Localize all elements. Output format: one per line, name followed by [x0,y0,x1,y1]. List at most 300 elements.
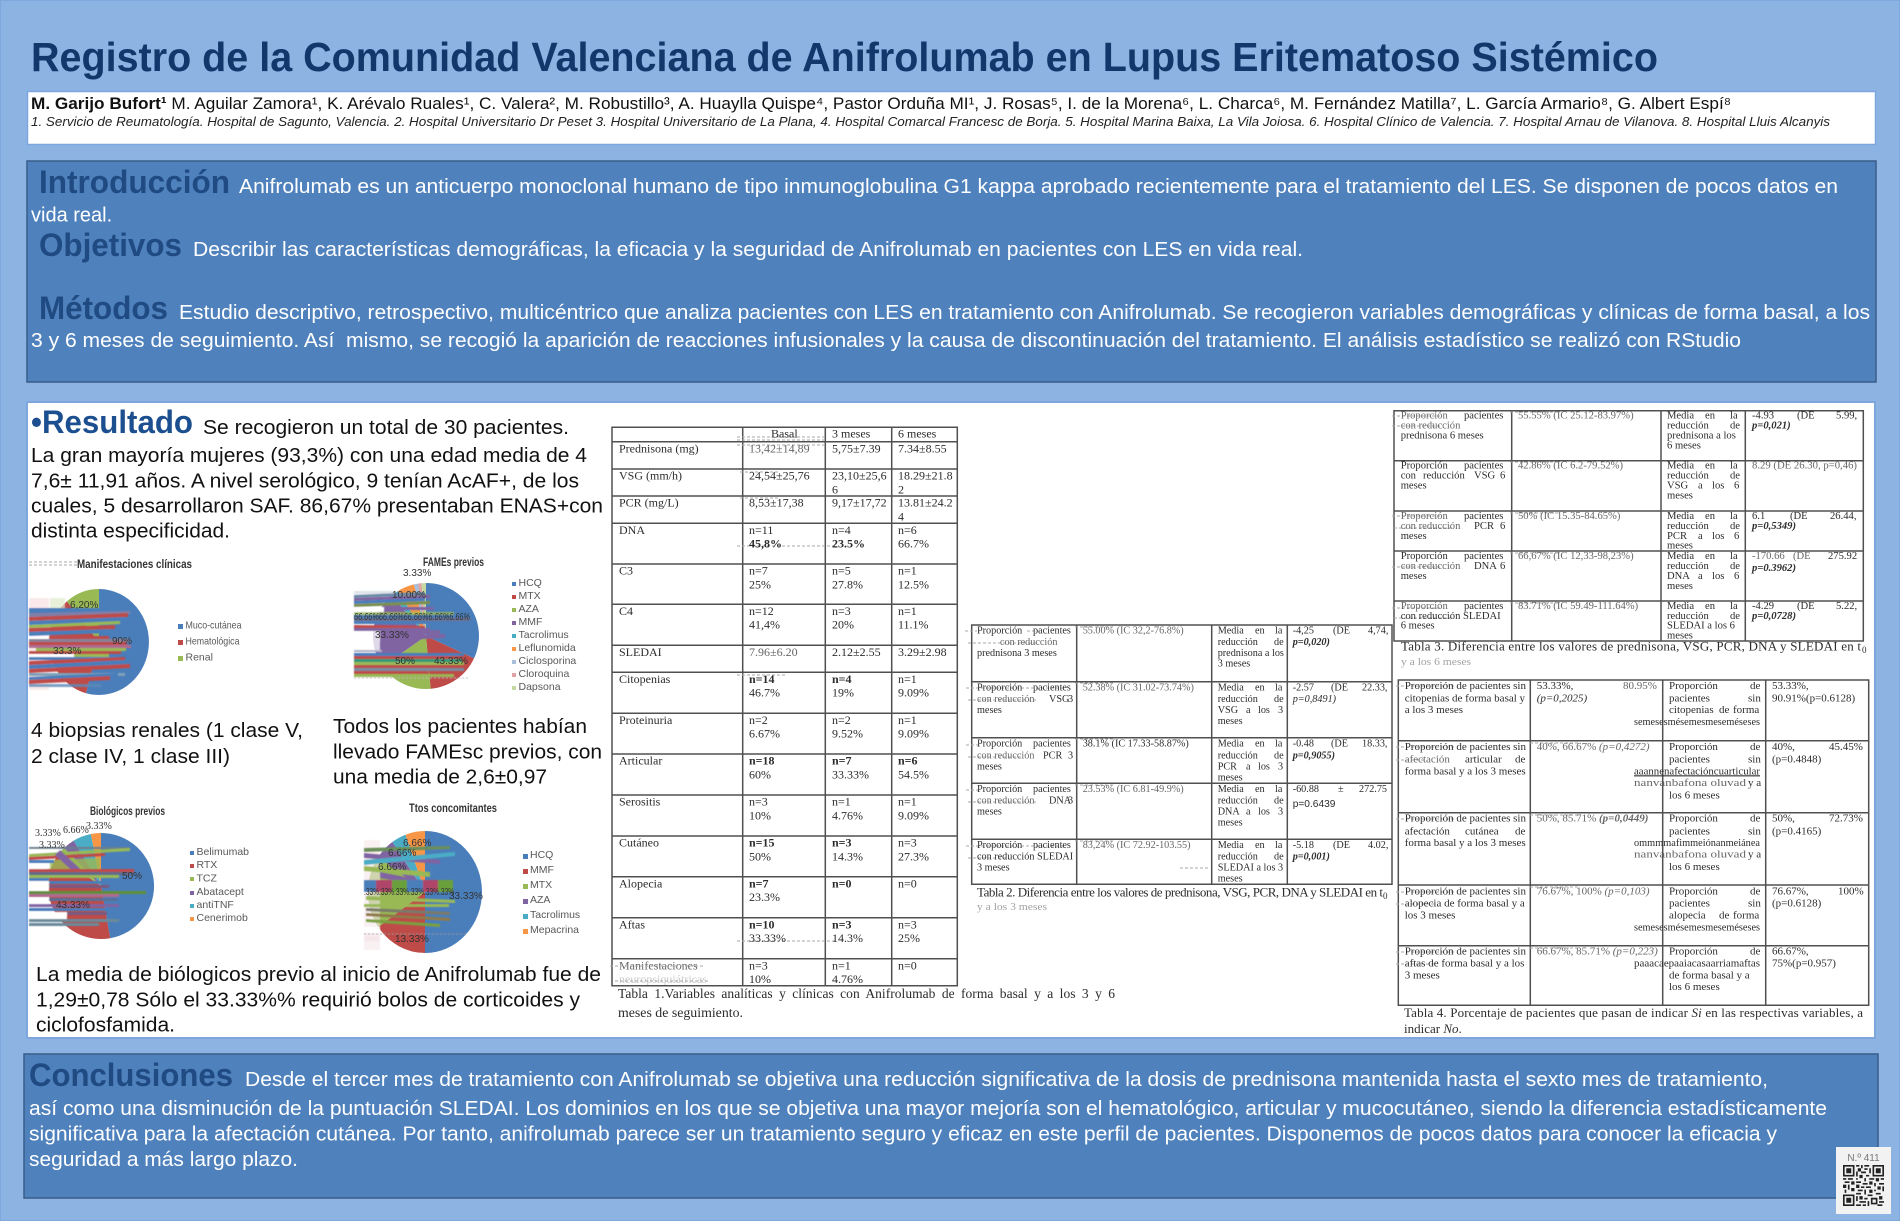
table 1: analytical and clinical variables: Proteinuria [619,713,673,727]
chart: FAMEs previos: 50% [395,656,415,667]
table 3: differences at 6 months: 42.86% (IC 6.2-79.52%) [1518,460,1624,471]
table 1: analytical and clinical variables: n=14 [749,672,775,686]
table 3: differences at 6 months: en [1705,511,1716,522]
table 2: differences at 3 months: pacientes [1033,784,1071,795]
table 3: differences at 6 months: meses [1667,540,1693,551]
table 2: differences at 3 months: 3 [1068,796,1073,807]
legend: TCZ [196,872,217,884]
table 1: analytical and clinical variables: n=0 [832,876,852,890]
table 3: differences at 6 months: 5.22, [1836,601,1857,612]
table 2: differences at 3 months: a [1246,705,1251,716]
table 1: analytical and clinical variables: 66.7% [898,537,929,551]
table 4: patients changing from yes to no: alopecia [1669,910,1706,922]
table 4: patients changing from yes to no: ommmmafimmeiónanmeiánea [1634,837,1760,849]
table 4: patients changing from yes to no: pacientes [1669,754,1710,766]
table 1: analytical and clinical variables: 7.96±6.20 [749,645,798,659]
table 2: differences at 3 months: 3 meses [1218,659,1250,670]
table 4: patients changing from yes to no: afectación [1405,754,1450,766]
table 2: differences at 3 months: meses [977,705,1002,716]
table 2: differences at 3 months: pacientes [1033,625,1071,636]
legend: Cloroquina [518,668,569,680]
table 1: analytical and clinical variables: Alopecia [619,876,663,890]
table 2: differences at 3 months: los [1258,761,1270,772]
table 4: patients changing from yes to no: Proporción [1669,885,1718,897]
table 1: analytical and clinical variables: n=18 [749,754,775,768]
legend [512,577,576,693]
table 4: patients changing from yes to no: (p=0,2025) [1537,693,1588,705]
table 3: differences at 6 months: pacientes [1464,601,1503,612]
table 3: differences at 6 months: 275.92 [1828,551,1857,562]
table 2: differences at 3 months: meses [1218,874,1243,885]
table 3: differences at 6 months: 83.71% (IC 59.49-111.64%) [1518,601,1639,612]
table 3: differences at 6 months: 6 [1500,521,1505,532]
table 1: analytical and clinical variables: n=12 [749,604,774,618]
table 4: patients changing from yes to no: de [1719,704,1730,716]
chart: Ttos concomitantes: 6.66% [378,862,406,873]
heading: Introducción: Introducción [39,164,230,200]
table 2: differences at 3 months: p=0,001) [1292,852,1330,863]
table 3: differences at 6 months: 6 [1734,480,1739,491]
table 4: patients changing from yes to no: y a [1748,777,1761,789]
table 1: analytical and clinical variables: 45,8% [749,537,782,551]
table 2: differences at 3 months: la [1275,739,1283,750]
table 4: patients changing from yes to no: 3 meses [1405,969,1440,981]
legend: MMF [530,864,554,876]
panel: introduction, objectives, methods [27,161,1876,382]
table 4: patients changing from yes to no: Proporción [1669,741,1718,753]
table 3: differences at 6 months: en [1705,551,1716,562]
table 4: patients changing from yes to no: Proporción de pacientes sin [1405,741,1526,753]
table 3: differences at 6 months: de [1730,561,1740,572]
table 1: analytical and clinical variables: 23.3% [749,890,780,904]
table 1: analytical and clinical variables: 6.67% [749,727,780,741]
chart: Ttos concomitantes: 13.33% [395,934,429,945]
table 2: differences at 3 months: 3 [1068,694,1073,705]
panel: authors [28,92,1876,144]
table 3: differences at 6 months: pacientes [1464,410,1503,421]
table 1: analytical and clinical variables: n=3 [749,958,768,972]
icon: QR code [1843,1165,1884,1206]
table 4: patients changing from yes to no: Proporción [1669,680,1718,692]
table 2: differences at 3 months: -60.88 [1293,784,1319,795]
table 3: differences at 6 months: SLEDAI a los 6 [1667,621,1735,632]
table 3: differences at 6 months: Media [1667,551,1694,562]
table 2: differences at 3 months: 23.53% (IC 6.81-49.9%) [1083,784,1184,795]
caption: table 2: y a los 3 meses [977,902,1047,913]
text: conclusions [29,1069,1827,1171]
chart: FAMEs previos: 3.33% [403,568,431,579]
table 3: differences at 6 months: meses [1401,480,1427,491]
table 3: differences at 6 months: de [1730,420,1740,431]
table 3: differences at 6 months: Proporción [1401,410,1448,421]
table 4: patients changing from yes to no: y a [1748,849,1761,861]
legend: Tacrolimus [518,629,569,641]
table 1: analytical and clinical variables: n=7 [749,876,769,890]
table 3: differences at 6 months: a [1698,531,1703,542]
table 2: differences at 3 months: 52.38% (IC 31.02-73.74%) [1083,682,1194,693]
text: previous biologics: 1,29±0,78 Sólo el 33.33%% requirió bolos de corticoides y [36,990,580,1012]
table 2: differences at 3 months: Media [1218,784,1244,795]
table 3: differences at 6 months: Media [1667,511,1694,522]
table 1: analytical and clinical variables: 7.34±8.55 [898,441,947,455]
table 3: differences at 6 months: DNA [1474,561,1497,572]
table 2: differences at 3 months: la [1275,682,1283,693]
table 4: patients changing from yes to no: forma [1733,704,1759,716]
table 1: analytical and clinical variables: 14.3% [832,849,863,863]
table 2: differences at 3 months: DNA [1218,807,1240,818]
table 4: patients changing from yes to no: citopenias [1669,704,1714,716]
table 4: patients changing from yes to no: citopenias de forma basal y [1405,693,1526,705]
table 1: analytical and clinical variables [610,426,957,986]
table 3: differences at 6 months: p=0.3962) [1751,563,1796,574]
chart: FAMEs previos [354,555,576,693]
table 4: patients changing from yes to no: forma [1733,910,1759,922]
legend: Renal [186,652,213,664]
table 4: patients changing from yes to no: 66.67%, 85.71% (p=0,223) [1537,945,1658,957]
caption: table 3 [1401,639,1867,668]
table 4: patients changing from yes to no: sin [1748,754,1761,766]
table 1: analytical and clinical variables: 2 [898,482,904,496]
table 2: differences at 3 months: SLEDAI a los 3 [1218,863,1283,874]
table 3: differences at 6 months: con [1401,470,1417,481]
table 2: differences at 3 months: meses [1218,818,1243,829]
table 3: differences at 6 months: 5.99, [1836,410,1857,421]
table 1: analytical and clinical variables: n=5 [832,564,851,578]
chart: Ttos concomitantes: Ttos concomitantes [409,801,497,815]
text: methods: Estudio descriptivo, retrospectivo, multicéntrico que analiza pacientes con LES en tratamiento con Anifrolumab. Se recogieron variables demográficas y clínicas de forma basal, a los [179,302,1870,324]
text: objectives: Describir las características demográficas, la eficacia y la seguridad de Anifrolumab en pacientes con LES en vida real. [193,239,1303,261]
table 4: patients changing from yes to no: semesesmésemesmeseméseses [1634,921,1760,933]
table 2: differences at 3 months: con reducción SLEDAI [977,852,1074,863]
table 3: differences at 6 months: 26.44, [1830,511,1856,522]
table 1: analytical and clinical variables: n=3 [832,604,851,618]
chart: FAMEs previos: 66.66%66.66%66.66%6.66%6.66% [354,612,470,623]
table 1: analytical and clinical variables: n=3 [898,917,917,931]
table 2: differences at 3 months: (DE [1331,682,1348,693]
table 2: differences at 3 months: Proporción [977,739,1022,750]
chart: Manifestaciones clínicas: Manifestaciones clínicas [77,557,192,571]
chart: Biológicos previos [29,804,249,939]
table 1: analytical and clinical variables: 10% [749,972,771,986]
table 2: differences at 3 months: reducción [1218,750,1258,761]
legend: Tacrolimus [530,909,580,921]
heading: Objetivos: Objetivos [39,227,182,263]
text: demographics: Se recogieron un total de 30 pacientes. [203,417,569,439]
table 3: differences at 6 months: en [1705,460,1716,471]
table 1: analytical and clinical variables: 23.5% [832,537,865,551]
table 4: patients changing from yes to no: paaacaepaaiacasaarriamaftas [1634,958,1760,970]
table 4: patients changing from yes to no: nanvanbafona oluvad [1634,849,1747,861]
table 2: differences at 3 months: a [1246,807,1251,818]
table 1: analytical and clinical variables: 9.09% [898,808,929,822]
legend: antiTNF [196,899,234,911]
table 4: patients changing from yes to no: 40%, 66.67% (p=0,4272) [1537,741,1650,753]
legend: RTX [196,859,217,871]
table 3: differences at 6 months: la [1730,551,1738,562]
table 3: differences at 6 months: la [1730,601,1738,612]
table 4: patients changing from yes to no: nanvanbafona oluvad [1634,777,1747,789]
table 3: differences at 6 months: la [1730,511,1738,522]
table 3: differences at 6 months: meses [1667,490,1693,501]
table 1: analytical and clinical variables: neuropsiquiátricas [619,972,707,986]
table 1: analytical and clinical variables: n=2 [749,713,768,727]
table 2: differences at 3 months: -5.18 [1293,840,1314,851]
legend [190,846,249,924]
table 3: differences at 6 months: Proporción [1401,601,1448,612]
table 2: differences at 3 months: de [1274,750,1284,761]
table 3: differences at 6 months: Proporción [1401,511,1448,522]
table 4: patients changing from yes to no: 53.33%, [1537,680,1574,692]
table 1: analytical and clinical variables: VSG (mm/h) [619,469,682,483]
table 2: differences at 3 months: -0.48 [1293,739,1314,750]
table 1: analytical and clinical variables: n=6 [898,754,918,768]
table 3: differences at 6 months: Proporción [1401,460,1448,471]
table 1: analytical and clinical variables: 4.76% [832,972,863,986]
table 2: differences at 3 months: Media [1218,739,1244,750]
chart: Manifestaciones clínicas: 6,20% [70,600,98,611]
table 1: analytical and clinical variables: 14.3% [832,931,863,945]
table 1: analytical and clinical variables: n=2 [832,713,851,727]
author list: M. Garijo Bufort¹ M. Aguilar Zamora¹, K. Arévalo Ruales¹, C. Valera², M. Robustillo³, A. Huaylla Quispe⁴, Pastor Orduña MI¹, J. Rosas⁵, I. de la Morena⁶, L. Charca⁶, M. Fernández Matilla⁷, L. García Armario⁸, G. Albert Espí⁸ [31,95,1731,113]
table 3: differences at 6 months: la [1730,410,1738,421]
text: previous biologics [36,964,601,1036]
table 3: differences at 6 months: la [1730,460,1738,471]
text: previous csDMARDs: Todos los pacientes habían [333,716,587,738]
table 4: patients changing from yes to no: 80.95% [1623,680,1657,692]
table 1: analytical and clinical variables: C4 [619,604,633,618]
table 2: differences at 3 months: p=0,9055) [1292,750,1335,761]
table 4: patients changing from yes to no: de forma basal y a [1669,969,1750,981]
table 2: differences at 3 months: 18.33, [1362,739,1387,750]
text: introduction: Anifrolumab es un anticuerpo monoclonal humano de tipo inmunoglobulina G1 kappa aprobado recientemente para el tratamiento del LES. Se disponen de pocos datos en [239,176,1838,198]
chart: Biológicos previos: 3.33% [35,828,61,839]
table 1: analytical and clinical variables: 24,54±25,76 [749,469,810,483]
text: demographics: distinta especificidad. [31,520,230,542]
table 2: differences at 3 months: de [1274,852,1284,863]
table 1: analytical and clinical variables: 54.5% [898,767,929,781]
table 3: differences at 6 months: reducción [1667,470,1709,481]
caption: table 1: meses de seguimiento. [618,1005,743,1020]
table 3: differences at 6 months: (DE [1793,551,1811,562]
table 4: patients changing from yes to no: 50%, [1772,813,1795,825]
table 4: patients changing from yes to no: Proporción de pacientes sin [1405,945,1526,957]
table 3: differences at 6 months: meses [1401,531,1427,542]
table 1: analytical and clinical variables: 3 meses [832,426,871,440]
table 2: differences at 3 months: en [1255,682,1265,693]
table 2: differences at 3 months: pacientes [1033,739,1071,750]
table 3: differences at 6 months: reducción [1667,521,1709,532]
legend: Leflunomida [518,642,576,654]
table 2: differences at 3 months: DNA [1049,796,1072,807]
table 3: differences at 6 months: (DE [1797,410,1815,421]
table 4: patients changing from yes to no: Proporción de pacientes sin [1405,885,1526,897]
table 2: differences at 3 months: reducción [1218,796,1258,807]
table 1: analytical and clinical variables: n=1 [898,713,917,727]
table 2: differences at 3 months: 38.1% (IC 17.33-58.87%) [1083,739,1189,750]
table 2: differences at 3 months: 4,74, [1368,625,1388,636]
table 1: analytical and clinical variables: n=0 [898,876,917,890]
table 1: analytical and clinical variables: 46.7% [749,686,780,700]
table 2: differences at 3 months: PCR [1043,750,1062,761]
table 4: patients changing from yes to no: 53.33%, [1772,680,1809,692]
table 1: analytical and clinical variables: 20% [832,618,854,632]
table 1: analytical and clinical variables: 27.3% [898,849,929,863]
table 2: differences at 3 months: 4.02, [1368,840,1388,851]
table 3: differences at 6 months: los [1712,531,1724,542]
legend [178,620,242,664]
table 3: differences at 6 months: 66,67% (IC 12,33-98,23%) [1518,551,1634,562]
chart: FAMEs previos: FAMEs previos [423,555,484,569]
caption: table 3: Tabla 3. Diferencia entre los valores de prednisona, VSG, PCR, DNA y SLEDAI en t [1401,639,1861,654]
table 1: analytical and clinical variables: 6 meses [898,426,937,440]
table 1: analytical and clinical variables: 18.29±21.8 [898,469,953,483]
table 2: differences at 3 months: meses [1218,716,1243,727]
table 3: differences at 6 months: p=0,021) [1751,420,1791,431]
table 4: patients changing from yes to no: forma basal y a los 3 meses [1405,837,1526,849]
table 3: differences at 6 months: meses [1401,571,1427,582]
chart: Biológicos previos: Biológicos previos [90,804,165,818]
table 2: differences at 3 months: p=0.6439 [1293,799,1336,810]
table 3: differences at 6 months: prednisona a los [1667,430,1736,441]
table 3: differences at 6 months: reducción [1667,420,1709,431]
table 4: patients changing from yes to no: sin [1748,693,1761,705]
table 3: differences at 6 months: (DE [1797,601,1815,612]
table 1: analytical and clinical variables: 4.76% [832,808,863,822]
table 2: differences at 3 months: VSG [1049,694,1070,705]
table 1: analytical and clinical variables: 60% [749,767,771,781]
table 4: patients changing from yes to no: los 3 meses [1405,910,1455,922]
table 4: patients changing from yes to no: de [1515,754,1526,766]
table 3: differences at 6 months: VSG [1474,470,1496,481]
table 1: analytical and clinical variables: n=15 [749,836,775,850]
table 1: analytical and clinical variables: PCR (mg/L) [619,496,679,510]
table 2: differences at 3 months: la [1275,784,1283,795]
table 3: differences at 6 months: de [1730,470,1740,481]
table 1: analytical and clinical variables: Articular [619,754,662,768]
affiliations: 1. Servicio de Reumatología. Hospital de Sagunto, Valencia. 2. Hospital Universitario Dr Peset 3. Hospital Universitario de La Plana, 4. Hospital Comarcal Francesc de Borja. 5. Hospital Marina Baixa, La Vila Joiosa. 6. Hospital Clínico de Valencia. 7. Hospital Arnau de Vilanova. 8. Hospital Lluis Alcanyis [31,114,1831,129]
text: conclusions: seguridad a más largo plazo. [29,1149,298,1171]
chart: Biológicos previos: 50% [122,871,142,882]
table 3: differences at 6 months: 50% (IC 15.35-84.65%) [1518,511,1621,522]
table 3: differences at 6 months: VSG [1667,480,1689,491]
table 2: differences at 3 months: -4,25 [1293,625,1314,636]
table 3: differences at 6 months: en [1705,410,1716,421]
text: conclusions: Desde el tercer mes de tratamiento con Anifrolumab se objetiva una reducción significativa de la dosis de prednisona mantenida hasta el sexto mes de tratamiento, [245,1069,1768,1091]
table 4: patients changing from yes to no: a los 3 meses [1405,704,1463,716]
table 1: analytical and clinical variables: 19% [832,686,854,700]
legend: Abatacept [196,886,244,898]
table 2: differences at 3 months: los [1258,705,1270,716]
table 2: differences at 3 months: ± [1338,784,1344,795]
table 1: analytical and clinical variables: Aftas [619,917,645,931]
table 3: differences at 6 months: 6.1 [1752,511,1765,522]
table 4: patients changing from yes to no: articular [1465,754,1502,766]
table 4: patients changing from yes to no: 50%, 85.71% (p=0,0449) [1537,813,1648,825]
table 2: differences at 3 months: con reducción [977,796,1034,807]
legend [523,849,580,936]
table 3: differences at 6 months: 6 meses [1401,621,1435,632]
table 2: differences at 3 months: Proporción [977,840,1022,851]
text: renal biopsies: 4 biopsias renales (1 clase V, [31,720,303,742]
table 4: patients changing from yes to no: Proporción de pacientes sin [1405,680,1526,692]
text: methods: 3 y 6 meses de seguimiento. Así mismo, se recogió la aparición de reacciones infusionales y la causa de discontinuación del tratamiento. El análisis estadístico se realizó con RStudio [31,330,1741,352]
table 4: patients changing from yes to no: 45.45% [1829,741,1863,753]
table 2: differences at 3 months: en [1255,739,1265,750]
table 1: analytical and clinical variables: 10% [749,808,771,822]
caption: table 3: 0 [1862,645,1867,655]
text: renal biopsies: 2 clase IV, 1 clase III) [31,746,230,768]
table 1: analytical and clinical variables: n=3 [832,917,852,931]
table 3: differences at 6 months: PCR [1667,531,1688,542]
table 3: differences at 6 months: reducción [1667,611,1709,622]
table 1: analytical and clinical variables: 9.09% [898,727,929,741]
table 4: patients changing from yes to no: de [1750,813,1760,825]
panel: conclusions [24,1054,1878,1198]
table 3: differences at 6 months [1392,410,1863,642]
table 2: differences at 3 months: a [1246,761,1251,772]
text: demographics: cuales, 5 desarrollaron SAF. 86,67% presentaban ENAS+con [31,496,603,518]
table 1: analytical and clinical variables: n=1 [898,604,917,618]
table 1: analytical and clinical variables: Cutáneo [619,836,659,850]
text: conclusions: significativa para la afectación cutánea. Por tanto, anifrolumab parece ser un tratamiento seguro y eficaz en este perfil de pacientes. Disponemos de pocos datos para conocer la eficacia y [29,1124,1777,1146]
table 3: differences at 6 months: a [1698,480,1703,491]
table 1: analytical and clinical variables: 4 [898,509,904,523]
text: previous biologics: La media de biólogicos previo al inicio de Anifrolumab fue de [36,964,601,986]
table 1: analytical and clinical variables: n=11 [749,523,773,537]
table 1: analytical and clinical variables: n=1 [898,564,917,578]
table 2: differences at 3 months: en [1255,784,1265,795]
legend: MMF [518,616,542,628]
table 1: analytical and clinical variables: 23,10±25,6 [832,469,887,483]
text: renal biopsies [31,720,303,768]
table 1: analytical and clinical variables: n=3 [749,795,768,809]
table 1: analytical and clinical variables: C3 [619,564,633,578]
table 2: differences at 3 months: la [1275,625,1283,636]
table 1: analytical and clinical variables: n=3 [832,836,852,850]
table 1: analytical and clinical variables: n=10 [749,917,775,931]
legend: Cenerimob [196,912,248,924]
table 2: differences at 3 months: Media [1218,840,1244,851]
table 4: patients changing from yes to no: (p=0.6128) [1772,898,1822,910]
table 3: differences at 6 months: p=0,5349) [1751,521,1796,532]
table 2: differences at 3 months [965,625,1392,885]
chart: Ttos concomitantes: 6.66% [403,838,431,849]
table 2: differences at 3 months: meses [1218,772,1243,783]
table 1: analytical and clinical variables: 9.52% [832,727,863,741]
table 3: differences at 6 months: pacientes [1464,511,1503,522]
table 2: differences at 3 months: 22.33, [1362,682,1387,693]
table 3: differences at 6 months: pacientes [1464,551,1503,562]
chart: Ttos concomitantes: 6.66% [388,848,416,859]
table 1: analytical and clinical variables: 9.09% [898,686,929,700]
table 1: analytical and clinical variables: 13.81±24.2 [898,496,953,510]
caption: table 2 [977,885,1388,913]
table 2: differences at 3 months: 3 [1278,761,1283,772]
chart: Biológicos previos: 6.66% [63,825,89,836]
legend: Dapsona [518,681,561,693]
table 2: differences at 3 months: con reducción [1000,637,1057,648]
table 4: patients changing from yes to no: de [1515,825,1526,837]
caption: table 3: y a los 6 meses [1401,657,1471,668]
table 1: analytical and clinical variables: n=1 [898,795,917,809]
heading: Resultado: •Resultado [31,404,193,440]
table 2: differences at 3 months: p=0,8491) [1292,694,1337,705]
chart: Ttos concomitantes [364,801,580,953]
table 1: analytical and clinical variables: n=1 [832,795,851,809]
table 2: differences at 3 months: (DE [1333,625,1350,636]
chart: FAMEs previos: 10.00% [392,590,426,601]
table 4: patients changing from yes to no: (p=0.4165) [1772,825,1822,837]
